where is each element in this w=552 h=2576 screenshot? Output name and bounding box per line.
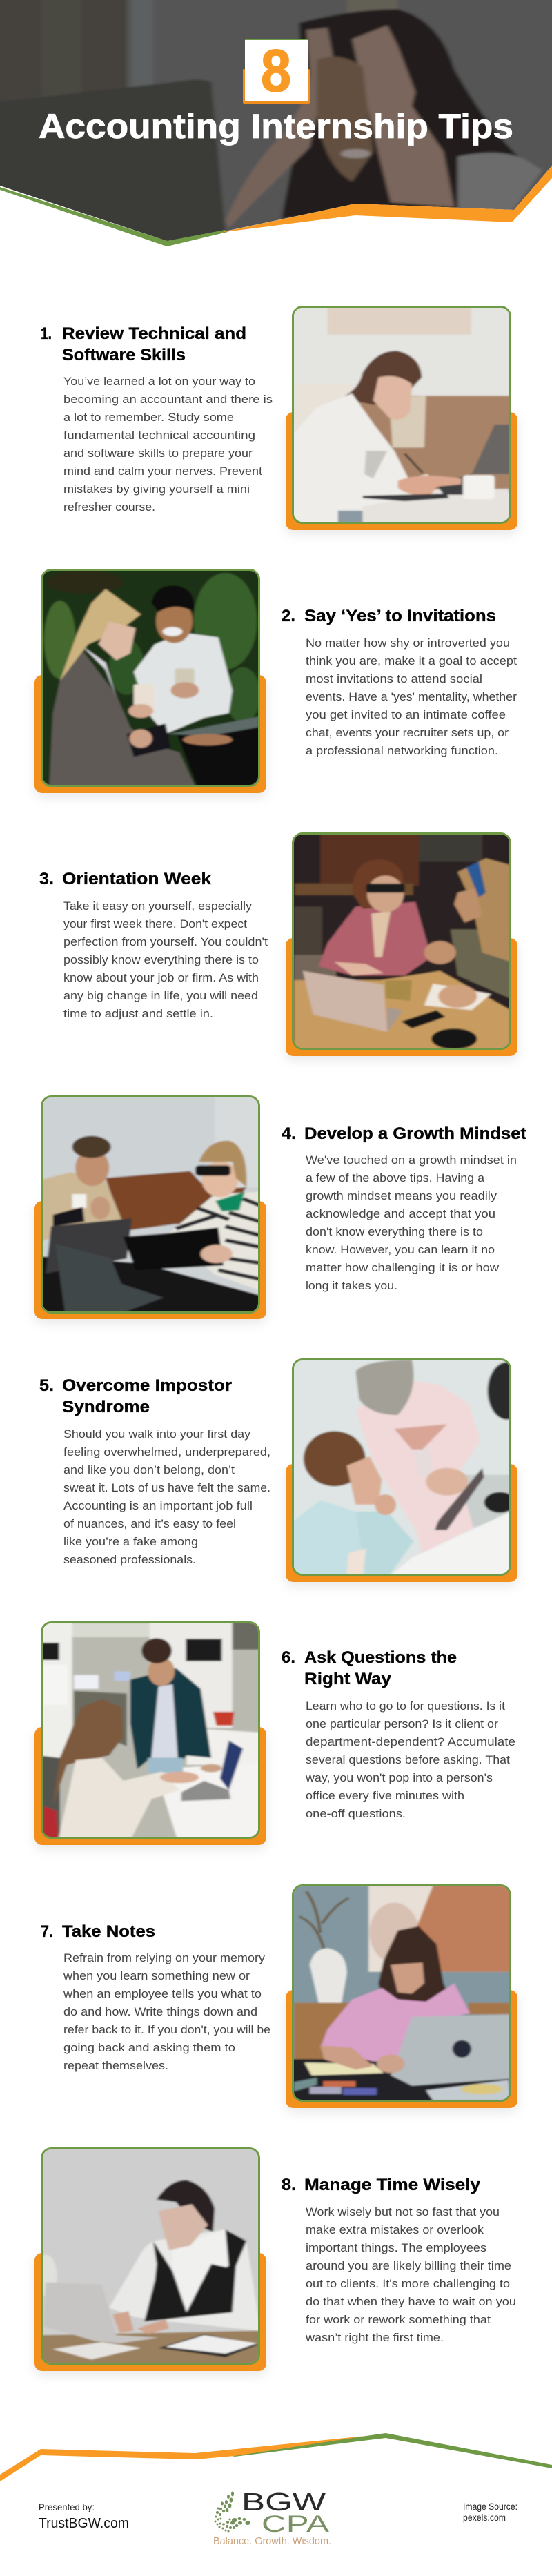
body text: You’ve learned a lot on your way to xyxy=(63,375,255,388)
body text: do and how. Write things down and xyxy=(63,2005,257,2018)
body text: wasn’t right the first time. xyxy=(305,2331,444,2344)
body text: mind and calm your nerves. Prevent xyxy=(63,465,262,478)
heading: 7. xyxy=(41,1922,53,1941)
orange card backing xyxy=(286,1464,518,1582)
body text: for work or rework something that xyxy=(306,2313,491,2326)
body text: several questions before asking. That xyxy=(306,1753,510,1766)
green photo frame xyxy=(293,834,511,1049)
heading: 1. xyxy=(41,324,52,343)
body text: perfection from yourself. You couldn't xyxy=(63,935,268,948)
orange card backing xyxy=(286,938,518,1056)
body text: most invitations to attend social xyxy=(306,672,482,685)
body text: Take it easy on yourself, especially xyxy=(63,899,253,913)
body text: out to clients. It's more challenging to xyxy=(306,2277,510,2290)
BGW CPA logo: Balance. Growth. Wisdom. xyxy=(213,2536,331,2547)
photo: two colleagues with coffee xyxy=(43,571,258,785)
body text: important things. The employees xyxy=(306,2241,486,2254)
body text: refresher course. xyxy=(63,500,155,514)
body text: a professional networking function. xyxy=(306,744,498,757)
heading: Software Skills xyxy=(62,346,186,364)
image source credit: pexels.com xyxy=(463,2512,506,2523)
green photo frame xyxy=(41,1622,259,1837)
body text xyxy=(63,1427,270,1566)
body text: you get invited to an intimate coffee xyxy=(306,708,506,721)
body text: chat, events your recruiter sets up, or xyxy=(306,726,509,739)
badge: number 8: 8 xyxy=(261,38,291,104)
body text: feeling overwhelmed, underprepared, xyxy=(63,1445,270,1458)
body text: think you are, make it a goal to accept xyxy=(306,654,517,667)
footer xyxy=(0,2433,552,2547)
banner orange edge xyxy=(219,166,552,233)
body text xyxy=(306,1153,517,1292)
body text xyxy=(305,2205,516,2344)
BGW CPA logo: BGW xyxy=(241,2488,326,2516)
photo: man and woman at office laptop xyxy=(43,1623,258,1837)
body text: becoming an accountant and there is xyxy=(63,393,273,406)
heading xyxy=(282,1648,457,1688)
BGW CPA logo xyxy=(213,2488,331,2547)
body text: matter how challenging it is or how xyxy=(306,1261,500,1274)
body text: Refrain from relying on your memory xyxy=(63,1951,266,1964)
orange card backing xyxy=(286,412,518,530)
body text: one particular person? Is it client or xyxy=(306,1717,498,1730)
body text: Should you walk into your first day xyxy=(63,1427,251,1441)
body text: like you’re a fake among xyxy=(63,1535,198,1548)
heading: Orientation Week xyxy=(62,870,212,888)
body text: don't know everything there is to xyxy=(306,1225,483,1238)
body text: your first week there. Don't expect xyxy=(63,917,247,930)
presented by credit: TrustBGW.com xyxy=(39,2516,129,2531)
heading: 5. xyxy=(39,1376,54,1395)
body text: and software skills to prepare your xyxy=(63,447,253,460)
body text xyxy=(63,375,273,514)
body text: time to adjust and settle in. xyxy=(63,1007,213,1020)
body text: growth mindset means you readily xyxy=(306,1189,497,1202)
panel: tip 8 xyxy=(34,2145,516,2371)
header banner xyxy=(0,0,552,267)
body text: Accounting is an important job full xyxy=(63,1499,253,1512)
body text: Work wisely but not so fast that you xyxy=(306,2205,500,2218)
green photo frame xyxy=(41,2148,259,2363)
heading: 6. xyxy=(282,1648,295,1667)
body text: We've touched on a growth mindset in xyxy=(306,1153,517,1167)
panel: tip 7 xyxy=(41,1882,518,2108)
heading: 3. xyxy=(39,870,54,888)
body text: and like you don’t belong, don’t xyxy=(63,1463,235,1476)
heading: Ask Questions the xyxy=(304,1648,457,1667)
heading: Manage Time Wisely xyxy=(304,2176,481,2194)
body text: do that when they have to wait on you xyxy=(306,2295,516,2308)
body text: seasoned professionals. xyxy=(63,1553,196,1566)
body text: possibly know everything there is to xyxy=(63,953,259,966)
orange card backing xyxy=(34,1727,266,1845)
photo: two colleagues with laptops and notebook xyxy=(43,1097,258,1311)
orange card backing xyxy=(34,1201,266,1319)
heading: Say ‘Yes’ to Invitations xyxy=(304,607,496,625)
panel: tip 5 xyxy=(39,1358,526,1582)
body text xyxy=(63,899,268,1020)
body text: of nuances, and it’s easy to feel xyxy=(63,1517,236,1530)
body text xyxy=(306,636,517,757)
panel: tip 1 xyxy=(41,304,518,530)
body text: a few of the above tips. Having a xyxy=(306,1171,485,1184)
title: Accounting Internship Tips xyxy=(39,107,513,146)
green photo frame xyxy=(41,570,259,786)
heading: 4. xyxy=(282,1124,296,1143)
image source credit: Image Source: xyxy=(463,2501,518,2512)
panel: tip 2 xyxy=(34,566,517,793)
body text xyxy=(63,1951,270,2072)
body text: when an employee tells you what to xyxy=(63,1987,262,2000)
heading: Right Way xyxy=(304,1670,392,1688)
body text xyxy=(305,1699,515,1820)
heading xyxy=(41,324,246,364)
body text: No matter how shy or introverted you xyxy=(306,636,510,650)
photo: two women at cafe table xyxy=(288,830,514,1051)
body text: mistakes by giving yourself a mini xyxy=(63,482,250,496)
footer orange zigzag line xyxy=(0,2436,366,2481)
body text: fundamental technical accounting xyxy=(63,429,255,442)
photo: woman writing at table xyxy=(288,304,514,525)
body text: a lot to remember. Study some xyxy=(63,411,234,424)
image source credit xyxy=(463,2501,518,2523)
photo: woman taking notes at laptop xyxy=(288,1882,514,2103)
body text: going back and asking them to xyxy=(63,2041,235,2054)
panel: tip 4 xyxy=(34,1093,526,1319)
heading: Overcome Impostor xyxy=(62,1376,232,1395)
BGW CPA logo: CPA xyxy=(262,2511,329,2537)
body text: around you are likely billing their time xyxy=(306,2259,511,2272)
green photo frame xyxy=(41,1096,259,1313)
body text: office every five minutes with xyxy=(306,1789,464,1802)
body text: long it takes you. xyxy=(306,1279,397,1292)
orange card backing xyxy=(34,675,266,793)
presented by credit xyxy=(39,2501,129,2531)
photo: woman typing at laptop xyxy=(43,2149,258,2363)
footer green zigzag line xyxy=(229,2433,552,2468)
body text: department-dependent? Accumulate xyxy=(306,1735,515,1748)
body text: one-off questions. xyxy=(306,1807,406,1820)
body text: Learn who to go to for questions. Is it xyxy=(306,1699,505,1713)
heading: 8. xyxy=(282,2176,296,2194)
heading: Syndrome xyxy=(62,1398,150,1416)
orange card backing xyxy=(34,2253,266,2371)
body text: repeat themselves. xyxy=(63,2059,168,2072)
banner green edge xyxy=(0,187,228,246)
body text: know about your job or firm. As with xyxy=(63,971,259,984)
heading: 2. xyxy=(282,607,295,625)
heading: Develop a Growth Mindset xyxy=(304,1124,526,1143)
body text: know. However, you can learn it no xyxy=(306,1243,495,1256)
photo: two women reviewing a tablet xyxy=(294,1360,509,1574)
presented by credit: Presented by: xyxy=(39,2501,95,2512)
body text: refer back to it. If you don't, you will be xyxy=(63,2023,270,2036)
body text: acknowledge and accept that you xyxy=(306,1207,495,1220)
orange card backing xyxy=(286,1990,518,2108)
body text: sweat it. Lots of us have felt the same. xyxy=(63,1481,270,1494)
body text: when you learn something new or xyxy=(63,1969,250,1982)
body text: any big change in life, you will need xyxy=(63,989,258,1002)
panel: tip 6 xyxy=(34,1620,515,1845)
heading: Take Notes xyxy=(62,1922,155,1941)
logo dots xyxy=(214,2492,250,2532)
body text: make extra mistakes or overlook xyxy=(306,2223,484,2236)
green photo frame xyxy=(293,1886,511,2101)
heading: Review Technical and xyxy=(62,324,246,343)
hero photo: stressed woman at laptop xyxy=(0,0,552,267)
green photo frame xyxy=(293,1360,511,1575)
heading xyxy=(39,1376,232,1416)
body text: events. Have a 'yes' mentality, whether xyxy=(306,690,517,703)
badge: number 8 xyxy=(243,38,310,104)
panel: tip 3 xyxy=(39,830,518,1056)
body text: way, you won't pop into a person's xyxy=(305,1771,493,1784)
green photo frame xyxy=(293,306,511,523)
